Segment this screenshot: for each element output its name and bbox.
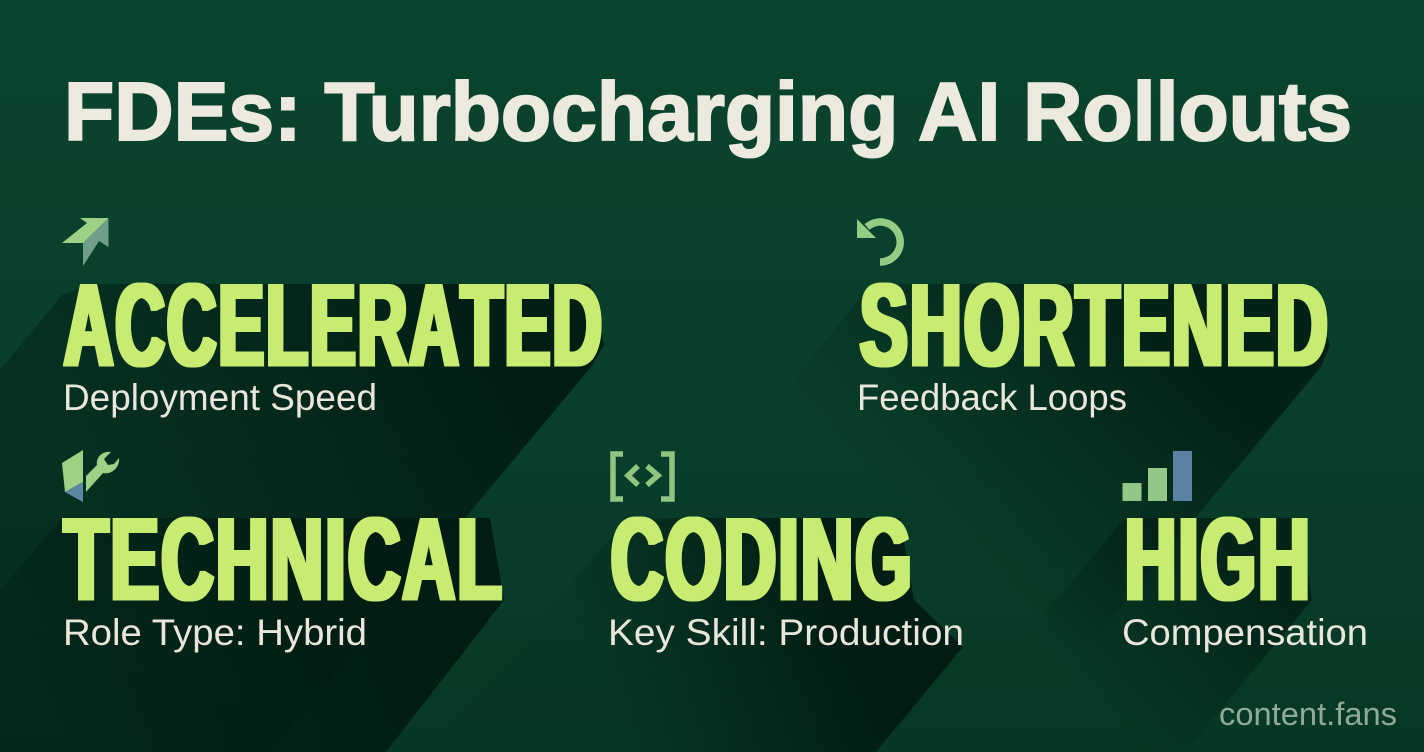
icon: loop arrow	[857, 219, 900, 262]
icon: code brackets	[613, 454, 672, 499]
stat: high compensation	[1122, 451, 1368, 653]
stat: technical role type	[62, 450, 504, 653]
icon: panel and wrench	[62, 450, 119, 502]
stat: accelerated deployment speed	[62, 218, 604, 418]
caption: Compensation: Compensation	[1122, 612, 1368, 653]
word: ACCELERATED: ACCELERATED	[64, 260, 604, 390]
watermark: content.fans	[1219, 696, 1397, 732]
icon: rising bars	[1122, 451, 1192, 501]
caption: Role Type: Hybrid: Role Type: Hybrid	[63, 612, 367, 653]
title: FDEs: Turbocharging AI Rollouts	[64, 65, 1352, 158]
caption: Deployment Speed: Deployment Speed	[63, 377, 377, 418]
word: TECHNICAL: TECHNICAL	[64, 494, 504, 624]
word: CODING: CODING	[611, 494, 914, 624]
stat: shortened feedback loops	[857, 219, 1330, 418]
caption: Feedback Loops: Feedback Loops	[857, 377, 1127, 418]
stat: coding key skill	[608, 454, 964, 653]
icon: diagonal arrow	[62, 218, 108, 266]
long shadows behind the words	[0, 284, 1330, 752]
caption: Key Skill: Production: Key Skill: Production	[608, 612, 964, 653]
